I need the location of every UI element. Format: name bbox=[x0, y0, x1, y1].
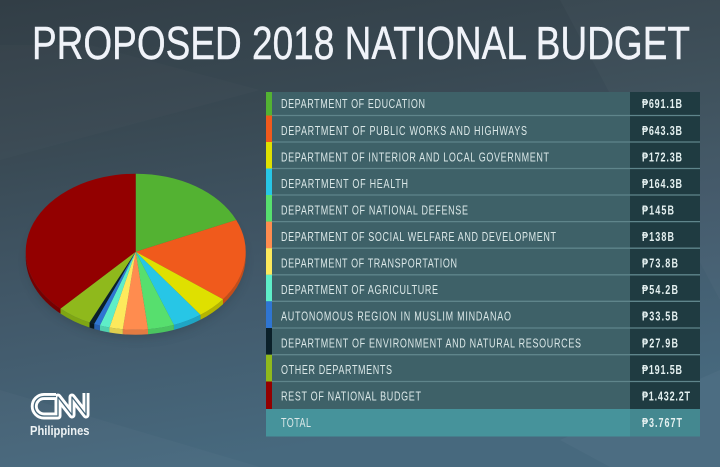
row: environment: ₱27.9B bbox=[642, 337, 678, 351]
row: social welfare: ₱138B bbox=[642, 231, 674, 244]
row: education bbox=[266, 92, 682, 116]
row: public works: DEPARTMENT OF PUBLIC WORKS AND HIGHWAYS bbox=[281, 125, 527, 138]
row: other departments: ₱191.5B bbox=[642, 364, 682, 377]
logo mark bbox=[34, 393, 86, 416]
row: rest of budget: ₱1.432.2T bbox=[642, 390, 690, 404]
row: public works bbox=[266, 116, 682, 142]
row: education: DEPARTMENT OF EDUCATION bbox=[281, 98, 425, 111]
row: defense bbox=[266, 195, 674, 222]
CNN Philippines logo bbox=[30, 393, 90, 438]
logo wordmark: Philippines bbox=[30, 424, 90, 438]
row: social welfare: DEPARTMENT OF SOCIAL WELFARE AND DEVELOPMENT bbox=[281, 231, 556, 244]
row: environment: DEPARTMENT OF ENVIRONMENT AND NATURAL RESOURCES bbox=[281, 337, 581, 351]
row: defense: DEPARTMENT OF NATIONAL DEFENSE bbox=[281, 204, 468, 218]
row: armm: ₱33.5B bbox=[642, 310, 678, 324]
row: total bbox=[281, 417, 682, 430]
row: defense: ₱145B bbox=[642, 204, 674, 218]
table row backgrounds bbox=[266, 92, 700, 436]
row: agriculture bbox=[266, 275, 678, 301]
row: health bbox=[266, 168, 682, 195]
row: agriculture: ₱54.2B bbox=[642, 284, 678, 297]
row: armm: AUTONOMOUS REGION IN MUSLIM MINDANAO bbox=[281, 310, 511, 324]
row: public works: ₱643.3B bbox=[642, 125, 682, 138]
pie chart bbox=[26, 174, 246, 338]
row: interior: ₱172.3B bbox=[642, 151, 682, 165]
row: social welfare bbox=[266, 222, 674, 248]
pie top slices bbox=[26, 174, 246, 330]
row: health: ₱164.3B bbox=[642, 178, 682, 191]
row: transportation bbox=[266, 248, 678, 275]
row: transportation: ₱73.8B bbox=[642, 257, 678, 271]
row: other departments bbox=[266, 355, 682, 382]
budget table bbox=[266, 92, 700, 436]
row: transportation: DEPARTMENT OF TRANSPORTATION bbox=[281, 257, 457, 271]
row: armm bbox=[266, 301, 678, 328]
row: environment bbox=[266, 328, 678, 355]
row: health: DEPARTMENT OF HEALTH bbox=[281, 178, 408, 191]
pie side walls bbox=[26, 252, 246, 335]
row: total: TOTAL bbox=[281, 417, 311, 430]
row: rest of budget bbox=[266, 382, 690, 409]
row: interior bbox=[266, 142, 682, 168]
row: rest of budget: REST OF NATIONAL BUDGET bbox=[281, 390, 421, 404]
row: education: ₱691.1B bbox=[642, 98, 682, 111]
row: agriculture: DEPARTMENT OF AGRICULTURE bbox=[281, 284, 438, 297]
row: other departments: OTHER DEPARTMENTS bbox=[281, 364, 392, 377]
row: total: ₱3.767T bbox=[642, 417, 682, 430]
row: interior: DEPARTMENT OF INTERIOR AND LOCAL GOVERNMENT bbox=[281, 151, 549, 165]
